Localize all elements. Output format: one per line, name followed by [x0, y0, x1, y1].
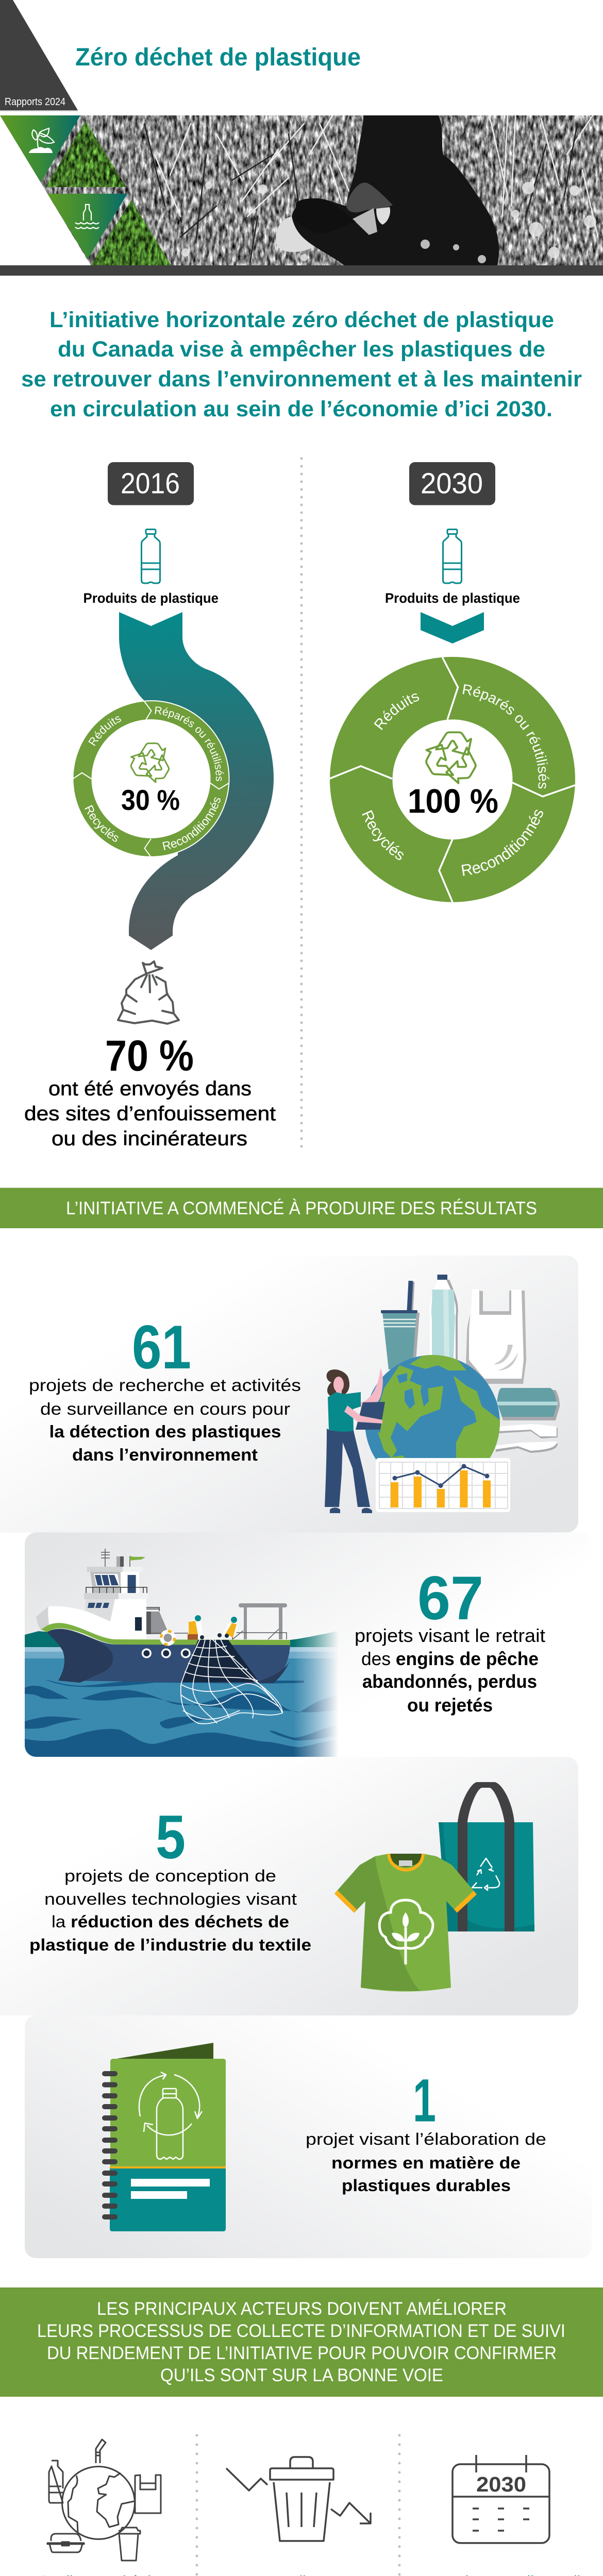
year badge 2030: [409, 462, 495, 505]
column 2016: [24, 462, 276, 1150]
illustration: fishing boat with net: [25, 1549, 344, 1757]
ring 100 percent: 100 %: [408, 782, 498, 820]
icon: plastic bottle: [141, 530, 160, 583]
description: [355, 1625, 545, 1716]
bear: [291, 115, 499, 265]
stat 67: 67: [417, 1564, 483, 1633]
stat 5: 5: [156, 1803, 186, 1872]
report tag triangle: [0, 0, 78, 111]
stat 1: 1: [413, 2067, 436, 2135]
green photo triangle: [44, 120, 129, 189]
section banner: key players: LES PRINCIPAUX ACTEURS DOIVENT AMÉLIORER: [97, 2299, 507, 2319]
description: la réduction des déchets de: [52, 1912, 289, 1931]
year badge 2016: 2016: [121, 467, 180, 500]
stat 61: 61: [132, 1313, 191, 1382]
section banner: results: L’INITIATIVE A COMMENCÉ À PRODUIRE DES RÉSULTATS: [66, 1198, 537, 1218]
result text 70 percent: ou des incinérateurs: [52, 1128, 247, 1150]
label: Produits de plastique: [385, 590, 520, 606]
gradient triangle with plant icon: [0, 115, 80, 182]
ribbon flow: [119, 612, 274, 950]
ring 100 percent: Reconditionnés: [461, 810, 543, 876]
result text 70 percent: ont été envoyés dans: [48, 1078, 252, 1100]
description: normes en matière de: [331, 2154, 521, 2172]
column: objective: [414, 2455, 588, 2576]
description: des engins de pêche: [361, 1648, 539, 1669]
result text 70 percent: [24, 1031, 276, 1150]
ring 30 percent: [73, 700, 230, 856]
icon: calendar 2030: 2030: [476, 2472, 526, 2496]
title: Zéro déchet de plastique: [75, 44, 361, 71]
description: dans l’environnement: [72, 1445, 258, 1464]
description: projets de conception de: [64, 1867, 276, 1885]
net: [181, 1638, 282, 1724]
result text 70 percent: des sites d’enfouissement: [24, 1103, 276, 1125]
report tag triangle: Rapports 2024: [5, 96, 65, 108]
intro statement: L’initiative horizontale zéro déchet de plastique: [49, 308, 554, 332]
description: projet visant l’élaboration de: [306, 2130, 546, 2148]
illustration: woman with clipboard: [325, 1368, 385, 1513]
description: [29, 1376, 301, 1464]
illustration: plastic items behind globe: [381, 1275, 560, 1453]
illustration: globe: [365, 1355, 500, 1460]
ring 30 percent: Réparés ou réutilisés: [155, 706, 224, 781]
ring 30 percent: Reconditionnés: [162, 798, 221, 850]
illustration: tote bag: [439, 1782, 534, 1931]
description: [306, 2130, 546, 2195]
ring 30 percent: Réduits: [88, 716, 121, 746]
ring 30 percent: Recyclés: [85, 805, 119, 842]
intro statement: du Canada vise à empêcher les plastiques de: [58, 337, 545, 362]
result text 70 percent: 70 %: [105, 1031, 194, 1080]
icon: recycling: [421, 732, 481, 786]
ring 100 percent: Recyclés: [362, 810, 404, 860]
column: performance: [219, 2457, 384, 2576]
illustration: notebook: [102, 2043, 226, 2231]
icon: garbage bag: [118, 961, 179, 1024]
description: projets de recherche et activités: [29, 1376, 301, 1395]
icon: recycling: [127, 743, 174, 785]
year badge 2030: 2030: [421, 467, 483, 500]
description: projets visant le retrait: [355, 1625, 545, 1646]
description: plastiques durables: [342, 2176, 511, 2195]
description: ou rejetés: [407, 1694, 493, 1716]
description: la détection des plastiques: [49, 1422, 281, 1441]
intro statement: se retrouver dans l’environnement et à les maintenir: [21, 367, 582, 392]
description: abandonnés, perdus: [362, 1671, 537, 1692]
year badge 2016: [108, 462, 194, 505]
banner photo: bear cub eating plastic in grass: [0, 115, 603, 265]
icon: trash can with declining trend: [226, 2457, 371, 2541]
gradient triangle with bottle in water icon: [47, 194, 127, 259]
column: data: [22, 2439, 175, 2576]
description: nouvelles technologies visant: [44, 1890, 297, 1908]
lifebuoy: [160, 1630, 176, 1646]
panel: 5 textile projects: [0, 1757, 578, 2015]
chevron: [421, 612, 484, 643]
section banner: key players: DU RENDEMENT DE L’INITIATIVE POUR POUVOIR CONFIRMER: [47, 2343, 557, 2363]
green photo triangle 2: [89, 198, 174, 265]
icon: calendar 2030: [453, 2455, 549, 2543]
panel: 61 research projects: [0, 1256, 578, 1532]
section banner: results: [0, 1188, 603, 1228]
column 2030: [330, 462, 575, 902]
section banner: key players: QU’ILS SONT SUR LA BONNE VOIE: [160, 2365, 443, 2385]
ring 30 percent: 30 %: [121, 784, 180, 816]
ring 100 percent: Réparés ou réutilisés: [463, 684, 549, 789]
icon: plastic bottle: [443, 530, 462, 583]
panel: 67 fishing gear projects: [25, 1532, 592, 1757]
description: plastique de l’industrie du textile: [29, 1936, 311, 1954]
dark bar under banner: [0, 265, 603, 276]
intro statement: en circulation au sein de l’économie d’ici 2030.: [50, 397, 552, 421]
panel: 1 sustainable plastics standards project: [25, 2015, 592, 2258]
icon: globe with plastic items: [47, 2439, 161, 2561]
section banner: key players: LEURS PROCESSUS DE COLLECTE D’INFORMATION ET DE SUIVI: [37, 2321, 565, 2341]
illustration: cotton t-shirt: [334, 1854, 477, 1992]
description: de surveillance en cours pour: [40, 1399, 290, 1418]
intro statement: [21, 308, 582, 421]
section banner: key players: [0, 2287, 603, 2397]
ring 100 percent: [330, 657, 575, 902]
ring 100 percent: Réduits: [374, 693, 420, 730]
muzzle and plastic: [276, 182, 393, 252]
fishermen: [188, 1615, 238, 1640]
description: [29, 1867, 311, 1954]
label: Produits de plastique: [83, 590, 219, 606]
chart card: [376, 1458, 510, 1512]
hull: [47, 1629, 290, 1683]
white left wedge: [0, 115, 91, 265]
